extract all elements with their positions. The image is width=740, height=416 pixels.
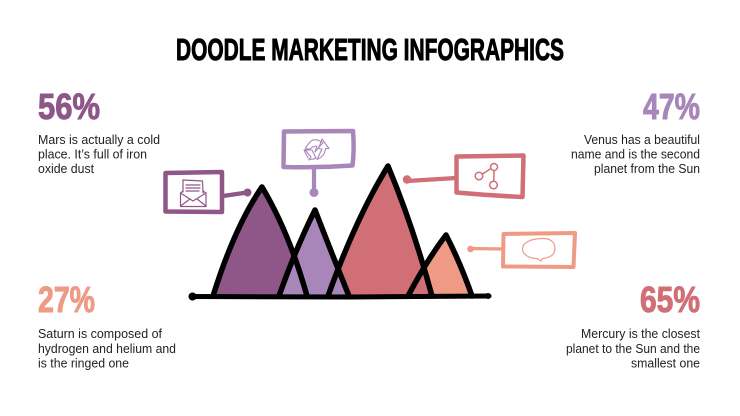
title: DOODLE MARKETING INFOGRAPHICS <box>176 32 564 67</box>
block: Venus 47% <box>571 86 700 176</box>
description: Saturn: Saturn is composed of <box>38 326 162 341</box>
description: Venus: name and is the second <box>571 146 700 162</box>
mountain chart <box>188 166 491 300</box>
percentage 56%: 56% <box>38 86 100 127</box>
description: Mercury: Mercury is the closest <box>581 326 700 341</box>
callout: speech bubble <box>467 233 575 267</box>
icon: share nodes <box>475 164 498 189</box>
percentage 65%: 65% <box>640 279 700 320</box>
description: Mars <box>38 132 160 176</box>
callout: sync arrows <box>284 131 354 197</box>
description: Mars: oxide dust <box>38 161 94 176</box>
description: Mercury <box>566 326 700 370</box>
percentage 47%: 47% <box>643 86 700 127</box>
description: Mars: Mars is actually a cold <box>38 132 160 147</box>
block: Mars 56% <box>38 86 160 176</box>
box <box>503 233 575 267</box>
icon: envelope with letter <box>180 180 206 206</box>
description: Mercury: smallest one <box>631 356 700 370</box>
block: Saturn 27% <box>38 279 176 370</box>
icon: sync arrows <box>304 139 329 160</box>
mountain fill: light purple <box>279 210 349 296</box>
description: Mercury: planet to the Sun and the <box>566 341 700 356</box>
callout: share nodes <box>403 156 524 197</box>
box <box>456 156 524 197</box>
description: Venus: Venus has a beautiful <box>584 132 700 147</box>
mountain fill: red <box>328 166 432 296</box>
connector <box>223 192 247 196</box>
mountain fill: salmon <box>408 235 472 296</box>
callout: envelope <box>166 172 252 212</box>
percentage 27%: 27% <box>38 279 95 320</box>
mountain outlines <box>192 166 489 297</box>
block: Mercury 65% <box>566 279 700 370</box>
mountain fill: dark purple <box>213 187 307 296</box>
connector <box>312 168 316 192</box>
baseline end dots <box>188 292 491 300</box>
description: Saturn <box>38 326 176 370</box>
connector <box>407 178 456 181</box>
description: Venus <box>571 132 700 176</box>
description: Venus: planet from the Sun <box>594 161 700 176</box>
box <box>284 131 354 167</box>
description: Saturn: is the ringed one <box>38 356 129 370</box>
connector <box>471 247 503 251</box>
icon: speech bubble <box>522 238 555 261</box>
description: Mars: place. It’s full of iron <box>38 146 147 162</box>
box <box>166 172 222 212</box>
description: Saturn: hydrogen and helium and <box>38 341 176 356</box>
